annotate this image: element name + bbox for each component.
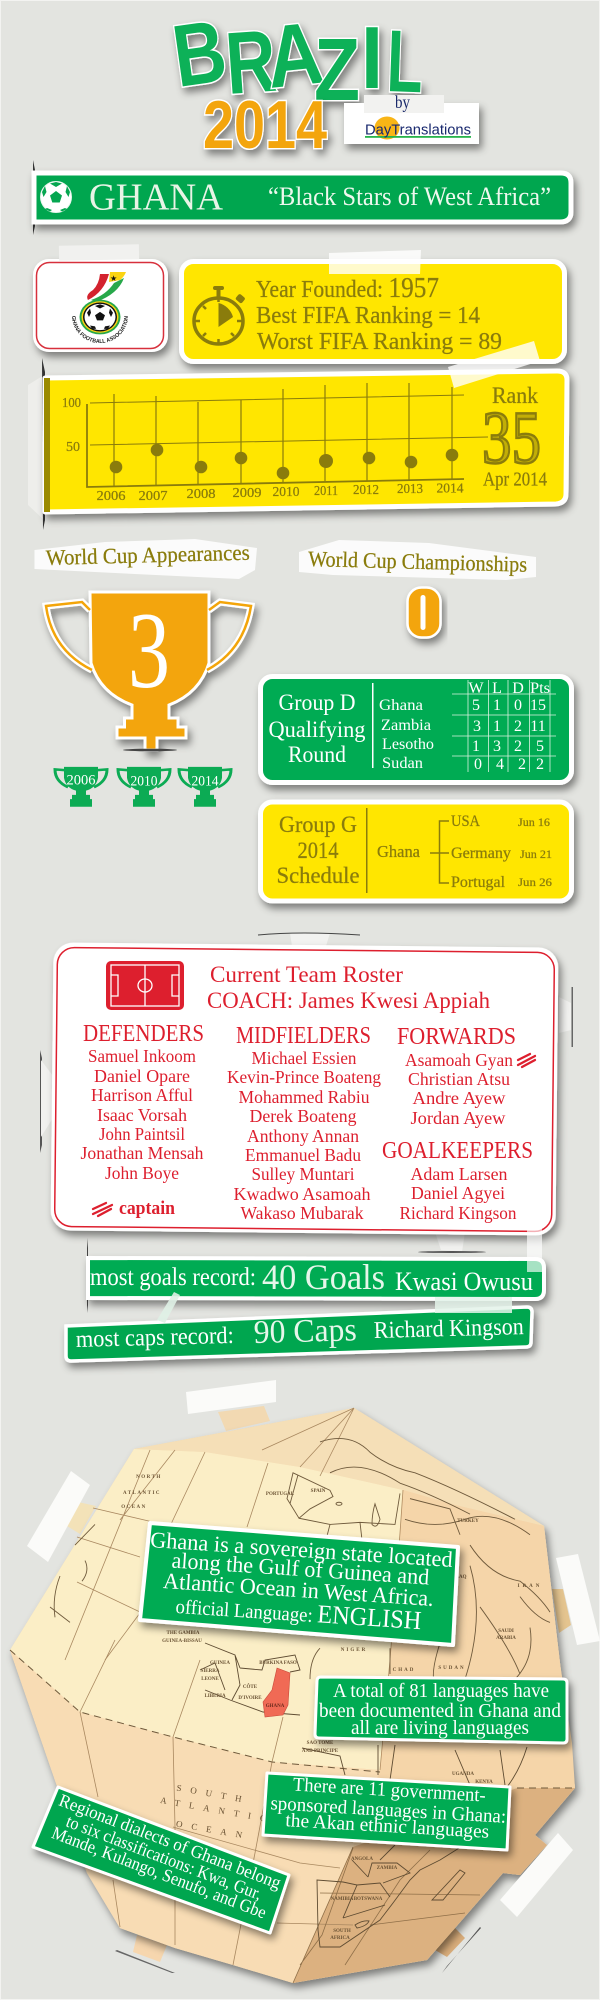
panel: Group G 2014 schedule: 2014 [298,838,339,863]
callout: 81 languages: been documented in Ghana and [319,1701,561,1722]
map place labels: LIBERIA [204,1694,226,1699]
panel: team facts: Worst FIFA Ranking = 89 [257,329,502,355]
list: defenders: John Boye [105,1163,179,1183]
callout: 11 government languages: sponsored languages in Ghana: [270,1793,507,1828]
map globe [10,1408,575,1983]
line chart: rank by year: 2008 [186,487,216,502]
logo: by DayTranslations [344,92,479,144]
list: goalkeepers [382,1138,533,1223]
line chart: rank by year: 2009 [232,486,262,501]
list: midfielders: MIDFIELDERS [236,1023,371,1049]
legend: captain: captain [119,1198,175,1219]
map highlight: Ghana [263,1668,290,1717]
panel: most goals record: most goals record: [90,1264,256,1291]
map place labels: ZAMBIA [377,1866,398,1871]
map place labels: BURKINA FASO [259,1661,297,1666]
icon: Ghana FA crest [72,272,128,343]
table: group standings: D [512,680,524,697]
title: Brazil 2014: B [167,1,232,106]
callout: regional dialects: to six classifications: Kwa, Gur, [63,1811,265,1904]
panel: Group D qualifying round: Qualifying [268,717,366,742]
callout: Ghana overview: Atlantic Ocean in West Africa. [162,1568,435,1611]
callout: Ghana overview: Ghana is a sovereign state located [150,1527,453,1572]
title: Brazil 2014 [167,1,425,163]
table: group standings: 3 [493,738,501,755]
map place labels: NAMIBIA [331,1897,354,1902]
panel: most caps record: most caps record: [75,1323,234,1353]
table: group standings: W [468,680,484,697]
line chart: rank by year: 2006 [96,489,126,504]
panel: most caps record: 90 Caps [253,1312,357,1351]
table: group standings: Zambia [381,717,431,734]
list: midfielders [227,1023,381,1223]
panel: FIFA rank history: Apr 2014 [483,468,547,490]
table: group standings [379,680,556,773]
bracket: Ghana fixtures [430,813,552,891]
panel: Group G 2014 schedule: Group G [279,812,357,837]
icon: small trophy 2014: 2014 [192,774,219,789]
icon: large trophy with 3 appearances [46,590,251,751]
list: defenders: John Paintsil [99,1124,185,1144]
bracket: Ghana fixtures: USA [451,813,480,830]
table: group standings: Sudan [382,755,423,772]
table: group standings: 1 [493,718,501,735]
panel: most goals record: 40 Goals [262,1257,385,1297]
tape strips on record bars [157,1210,542,1323]
table: group standings: 0 [514,697,522,714]
table: group standings: 5 [536,738,544,755]
line chart: rank by year: 100 [62,396,81,411]
icon: small trophy 2006: 2006 [66,773,96,788]
panel: current team roster: COACH: James Kwesi Appiah [207,988,490,1013]
list: midfielders: Wakaso Mubarak [240,1203,364,1223]
panel: current team roster [40,933,573,1253]
bracket: Ghana fixtures: Jun 16 [518,815,550,829]
panel: Group D qualifying round: Round [288,742,346,767]
title: Brazil 2014: 2014 [203,87,327,163]
panel: Group G 2014 schedule: Ghana [377,842,420,861]
panel: Ghana title bar [33,160,571,235]
list: midfielders: Emmanuel Badu [245,1145,361,1165]
map place labels: AND PRINCIPE [302,1749,339,1754]
map grid lines [65,1408,480,1983]
globe face: lower right [293,1788,575,1983]
map place labels: OCEAN [121,1505,147,1510]
map place labels [121,1475,542,1941]
callout: 11 government languages: the Akan ethnic languages [285,1810,490,1843]
icon: large trophy with 3 appearances: 3 [128,590,170,711]
callout: 81 languages: all are living languages [351,1718,529,1739]
bracket: Ghana fixtures: Jun 21 [520,847,552,861]
list: goalkeepers: Richard Kingson [400,1203,516,1223]
map highlight: Ghana: GHANA [266,1704,285,1709]
list: defenders: DEFENDERS [83,1021,204,1047]
list: forwards: Andre Ayew [412,1088,506,1108]
panel: Group G 2014 schedule [260,802,572,901]
table: group standings: 11 [530,718,546,735]
map place labels: SUDAN [438,1666,466,1671]
table: group standings: 1 [493,697,501,714]
list: goalkeepers: GOALKEEPERS [382,1138,533,1164]
globe face: centre [10,1449,403,1770]
callout: 11 government languages: There are 11 government- [292,1774,486,1807]
map place labels: OCEAN [175,1819,252,1842]
heading: World Cup Appearances: World Cup Appearances [45,540,250,570]
map place labels: SOUTH [176,1783,251,1805]
list: midfielders: Michael Essien [252,1048,356,1068]
map place labels: SOUTH [333,1929,351,1934]
map borders: Europe, Middle East, North Africa [50,1438,550,1684]
map place labels: NIGER [341,1648,367,1653]
list: midfielders: Anthony Annan [247,1126,359,1146]
map place labels: KENYA [475,1780,493,1785]
list: midfielders: Mohammed Rabiu [238,1087,370,1107]
list: forwards: Christian Atsu [408,1069,510,1089]
heading: World Cup Championships: World Cup Championships [308,546,527,577]
map place labels: ARABIA [496,1636,516,1641]
title: Brazil 2014: L [385,11,425,111]
globe face: right [353,1490,575,1847]
panel: Ghana title bar: GHANA [89,176,224,218]
panel: Ghana title bar: “Black Stars of West Africa” [268,182,551,211]
icon: small trophy 2010: 2010 [130,774,158,789]
panel: Group D qualifying round: Group D [278,690,356,715]
list: forwards: Jordan Ayew [410,1108,506,1128]
list: midfielders: Derek Boateng [250,1106,356,1126]
legend: captain [93,1198,175,1219]
line chart: rank by year: 2010 [272,485,300,500]
map place labels: UGANDA [452,1772,474,1777]
callout: regional dialects: Regional dialects of Ghana belong [56,1790,284,1893]
icon: captain mark on Gyan [518,1054,535,1067]
panel: FIFA rank history: Rank [492,383,538,408]
panel: Ghana FA badge [30,244,176,362]
map place labels: TURKEY [457,1519,479,1524]
championships count: 0 [408,588,440,638]
callout: regional dialects [33,1787,289,1933]
table: group standings: 2 [536,756,544,773]
map place labels: ATLANTIC [123,1491,161,1496]
callout: 81 languages: A total of 81 languages have [333,1681,549,1702]
logo: by DayTranslations: by [395,92,410,112]
map borders: West and southern Africa [200,1643,527,1947]
map place labels: ANGOLA [351,1857,373,1862]
callout: Ghana overview: official Language: ENGLISH [175,1590,422,1635]
map equator dashed line [10,1650,575,1788]
line chart: rank by year [62,383,488,504]
panel: most goals record [87,1238,544,1313]
icon: small trophy 2010 [118,767,170,807]
callout: Ghana overview [140,1523,458,1645]
title: Brazil 2014: R [222,11,279,113]
panel: most goals record: Kwasi Owusu [395,1267,533,1296]
title: Brazil 2014: I [361,8,383,107]
panel: Group G 2014 schedule: Schedule [276,863,360,888]
table: group standings: 2 [518,756,526,773]
list: defenders: Jonathan Mensah [80,1143,204,1163]
table: group standings: 5 [472,697,480,714]
panel: team facts: Year Founded: 1957 [256,273,439,304]
panel: Group D qualifying round [260,676,572,782]
panel: current team roster: Current Team Roster [210,962,403,987]
icon: small trophy 2006 [55,767,107,807]
globe face: lower left [10,1650,380,1983]
map place labels: PORTUGAL [266,1492,295,1497]
bracket: Ghana fixtures: Germany [451,845,511,862]
map place labels: CHAD [393,1668,415,1673]
table: group standings: L [492,680,502,697]
table: group standings: 2 [514,738,522,755]
callout: Ghana overview: along the Gulf of Guinea and [171,1547,430,1590]
panel: most caps record: Richard Kingson [373,1314,524,1344]
map place labels: THE GAMBIA [167,1631,200,1636]
table: group standings: 15 [530,697,546,714]
tape strips around globe [27,1380,600,1917]
map place labels: SAUDI [498,1629,514,1634]
callout: 81 languages [315,1677,567,1743]
list: forwards [397,1024,516,1128]
map place labels: D'IVOIRE [238,1696,262,1701]
icon: stopwatch [194,286,246,344]
list: defenders: Harrison Afful [91,1085,193,1105]
table: group standings: Lesotho [382,736,434,753]
map place labels: AFRICA [330,1936,350,1941]
map place labels: LEONE [201,1677,219,1682]
list: forwards: FORWARDS [397,1024,516,1050]
map place labels: GUINEA-BISSAU [162,1639,202,1644]
table: group standings: 0 [474,756,482,773]
map place labels: IRAN [518,1584,542,1589]
table: group standings: 1 [472,738,480,755]
callout: regional dialects: Mande, Kulango, Senufo, and Gbe [49,1822,269,1922]
icon: Ghana FA crest: GHANA FOOTBALL ASSOCIATION [72,316,128,343]
icon: Ghana FA crest: ★ [110,274,117,283]
table: group standings: 4 [496,756,504,773]
list: forwards: Asamoah Gyan [405,1050,513,1070]
icon: football pitch [106,961,184,1010]
bracket: Ghana fixtures: Portugal [451,874,506,891]
map place labels: BOTSWANA [354,1897,383,1902]
list: defenders: Samuel Inkoom [88,1046,196,1066]
list: defenders [80,1021,204,1183]
line chart: rank by year: 2011 [314,484,338,499]
line chart: rank by year: 2013 [397,482,423,497]
map place labels: IRAQ [453,1575,467,1580]
table: group standings: 2 [514,718,522,735]
map place labels: ATLANTIC [160,1795,276,1825]
line chart: rank by year: 50 [66,440,80,455]
table: group standings: 3 [473,718,481,735]
map place labels: SPAIN [311,1489,326,1494]
panel: FIFA rank history: 35 [482,397,541,480]
list: goalkeepers: Daniel Agyei [411,1183,505,1203]
bracket: Ghana fixtures: Jun 26 [518,875,552,889]
map place labels: CÔTE [243,1684,258,1690]
map place labels: GUINEA [210,1661,230,1666]
title: Brazil 2014: A [262,3,328,107]
icon: soccer ball [40,182,72,212]
list: midfielders: Sulley Muntari [252,1164,354,1184]
list: midfielders: Kwadwo Asamoah [234,1184,370,1204]
map place labels: SIERRA [201,1669,220,1674]
title: Brazil 2014: Z [314,20,360,119]
icon: small trophy 2014 [179,767,231,807]
line chart: rank by year: 2014 [436,482,464,496]
list: defenders: Isaac Vorsah [97,1105,187,1125]
table: group standings: Ghana [379,697,423,714]
map place labels: NORTH [136,1475,162,1480]
callout: 11 government languages [263,1773,510,1850]
list: midfielders: Kevin-Prince Boateng [227,1067,381,1087]
list: goalkeepers: Adam Larsen [410,1164,508,1184]
globe face: top [134,1408,544,1526]
list: defenders: Daniel Opare [94,1066,190,1086]
panel: most caps record [66,1307,532,1361]
paper tabs around globe [67,1406,571,1973]
panel: team facts: Best FIFA Ranking = 14 [256,303,480,329]
panel: FIFA rank history [28,341,567,530]
map place labels: SAO TOME [307,1741,334,1746]
table: group standings: Pts [530,680,550,697]
logo: by DayTranslations: DayTranslations [365,122,471,138]
line chart: rank by year: 2012 [353,483,379,498]
panel: team facts [182,250,564,362]
line chart: rank by year: 2007 [138,489,168,504]
